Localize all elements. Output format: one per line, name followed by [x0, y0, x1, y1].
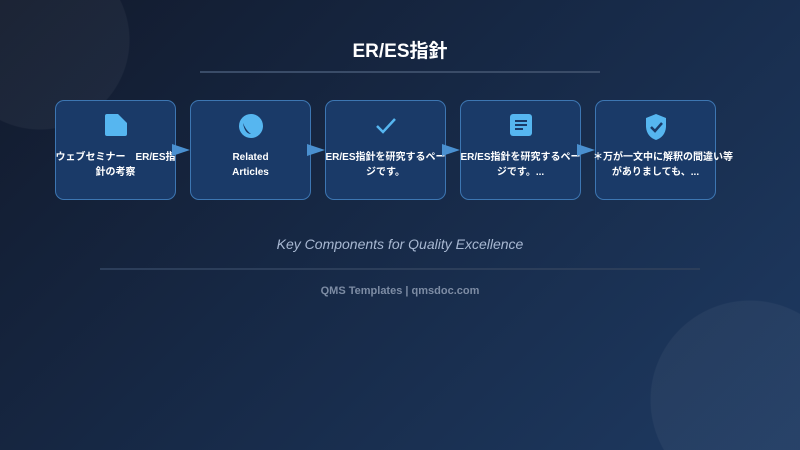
step 4: ジです。...	[497, 167, 544, 178]
icon: check	[376, 118, 396, 134]
icon: shield	[646, 114, 666, 140]
arrow	[442, 144, 460, 156]
subtitle: Key Components for Quality Excellence	[277, 236, 523, 252]
step 5	[595, 100, 716, 200]
arrow	[172, 144, 190, 156]
icon: globe	[239, 114, 263, 138]
step 1	[55, 100, 176, 200]
step 4: ER/ES指針を研究するペー	[460, 152, 580, 163]
arrow	[307, 144, 325, 156]
icon: article	[510, 114, 532, 136]
step 3	[325, 100, 446, 200]
step 1: ウェブセミナー ER/ES指	[55, 152, 176, 163]
step 2	[190, 100, 311, 200]
step 3: ER/ES指針を研究するペー	[325, 152, 446, 163]
title: ER/ES指針	[352, 41, 448, 62]
step 1: 針の考察	[96, 167, 136, 178]
step 2: Articles	[232, 167, 269, 178]
step 3: ジです。	[366, 167, 405, 178]
icon: document	[105, 114, 127, 136]
step 4	[460, 100, 581, 200]
step 5: がありましても、...	[612, 167, 699, 178]
arrow	[577, 144, 595, 156]
footer: QMS Templates | qmsdoc.com	[321, 285, 479, 297]
step 5: ＊万が一文中に解釈の間違い等	[593, 152, 733, 163]
step 2: Related	[232, 152, 269, 163]
